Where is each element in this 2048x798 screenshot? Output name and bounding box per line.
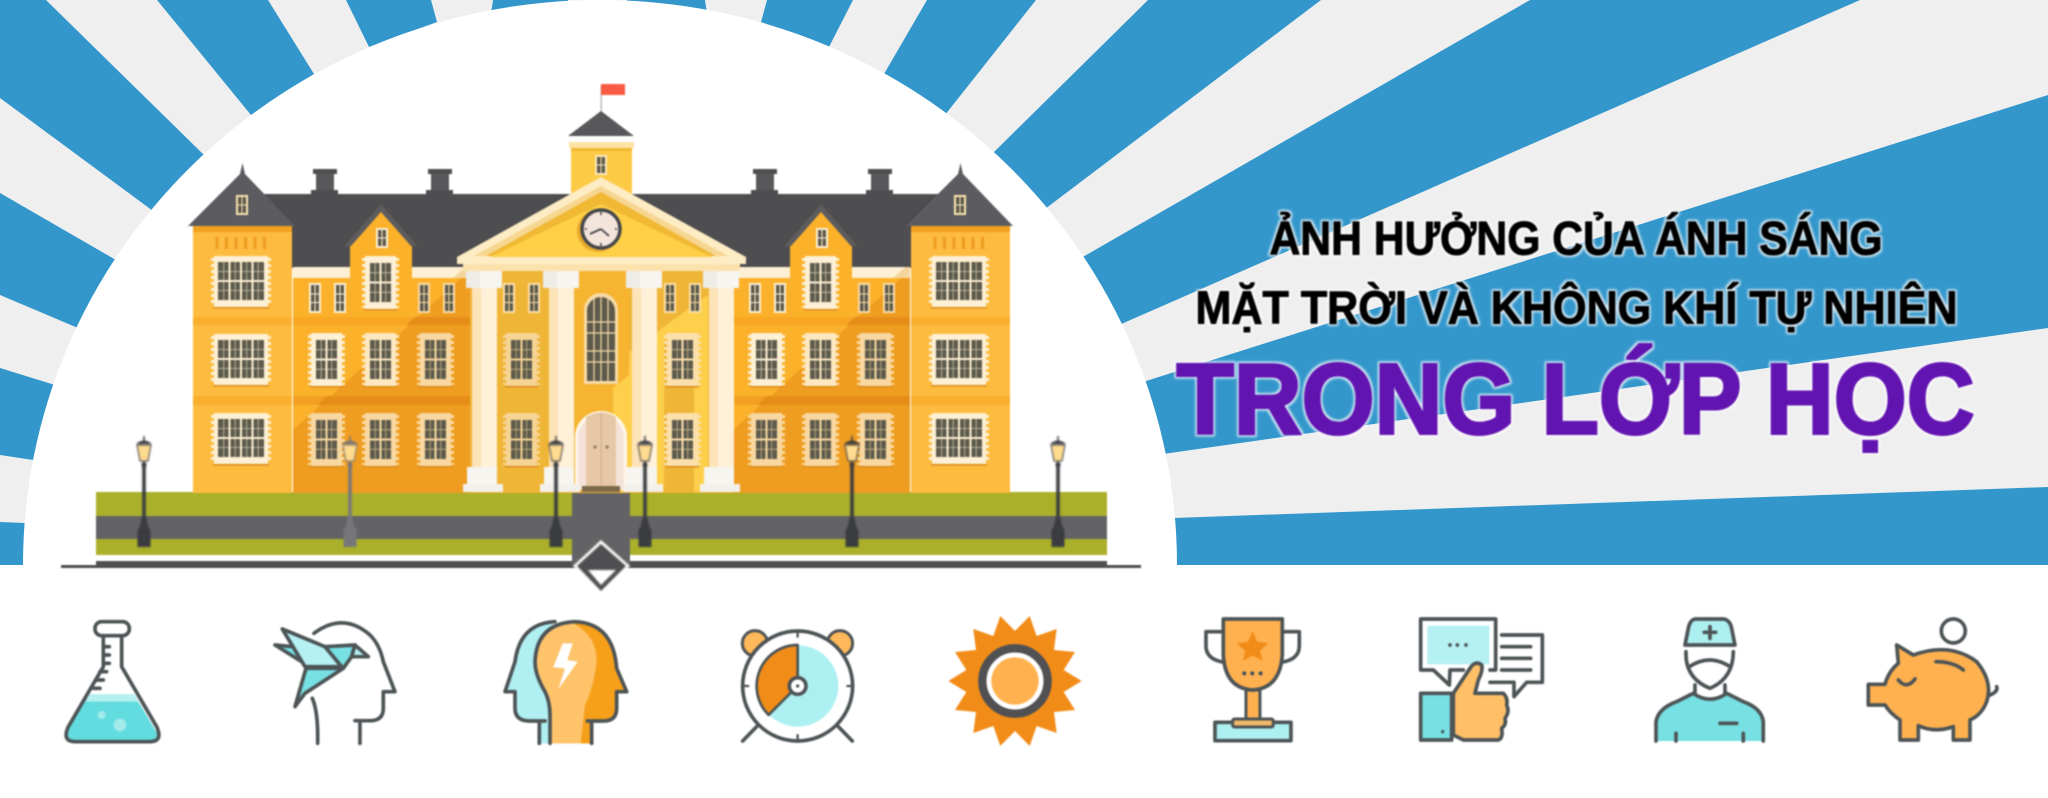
icon: trophy (1206, 619, 1299, 741)
flag and turret (568, 84, 634, 196)
portico windows (503, 283, 701, 468)
wings (293, 205, 910, 493)
icon: sun (948, 616, 1082, 746)
columns (463, 271, 740, 492)
central portico (457, 177, 746, 493)
icon: piggy bank (1868, 619, 1997, 740)
icon: diamond marker (573, 540, 630, 594)
title line 3: TRONG LỚP HỌC (1176, 344, 1974, 456)
main roof (263, 194, 940, 268)
lower white band (0, 565, 2048, 798)
icon: thumbs up with speech bubbles (1421, 619, 1542, 740)
background: sun rays (0, 0, 2048, 565)
chimneys (311, 169, 893, 195)
icon: two heads with lightning bolt (505, 622, 627, 743)
icon: flask (66, 622, 159, 742)
title line 2: MẶT TRỜI VÀ KHÔNG KHÍ TỰ NHIÊN (1196, 282, 1958, 334)
street lamps (136, 436, 1066, 547)
door (575, 411, 627, 492)
arched window (584, 293, 618, 384)
icon: head with origami bird (275, 623, 395, 743)
pediment (457, 177, 746, 271)
icon: doctor (1656, 619, 1763, 741)
ground: lawn and road (61, 492, 1141, 568)
school building (61, 84, 1997, 746)
title line 1: ẢNH HƯỞNG CỦA ÁNH SÁNG (1270, 212, 1882, 264)
clock (577, 210, 620, 252)
white dome (23, 0, 1177, 565)
icon: alarm clock (742, 631, 853, 741)
title text (1176, 212, 1974, 456)
towers (188, 163, 1013, 493)
